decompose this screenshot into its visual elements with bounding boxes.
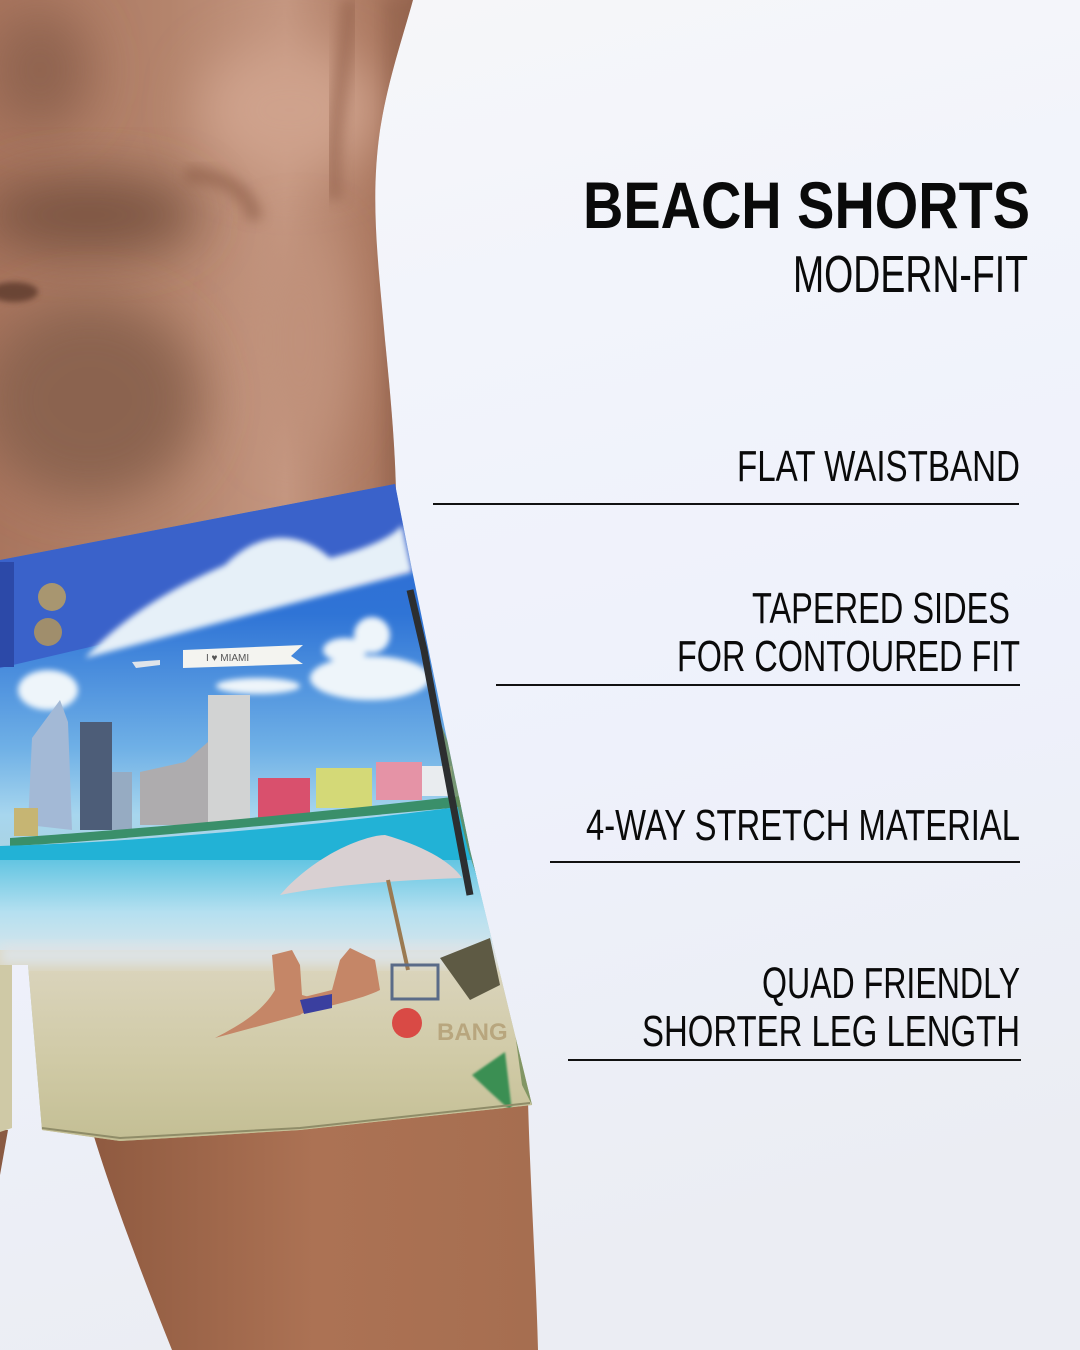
banner xyxy=(183,645,303,668)
feature: tapered sides xyxy=(496,584,1020,686)
photo: buttons xyxy=(34,583,66,646)
banner: I ♥ MIAMI xyxy=(206,653,249,664)
photo: far leg of shorts xyxy=(0,962,12,1132)
sea xyxy=(0,804,490,880)
beach table xyxy=(392,965,438,999)
feature: shorter leg xyxy=(568,959,1021,1061)
photo: hem xyxy=(42,1103,530,1138)
sand xyxy=(0,950,540,1150)
umbrella xyxy=(280,835,462,895)
photo: zipper xyxy=(410,590,470,895)
plane xyxy=(132,660,160,668)
swim trunks xyxy=(300,994,332,1014)
woman xyxy=(215,950,307,1038)
palm xyxy=(442,726,532,1105)
logo text on shorts: BANG xyxy=(437,1019,508,1046)
chair xyxy=(440,938,500,1000)
photo: model thigh xyxy=(92,1100,538,1350)
skyline xyxy=(28,700,72,830)
photo: printed beach shorts xyxy=(0,480,540,1150)
photo: waist placket xyxy=(0,562,14,667)
ball xyxy=(392,1008,422,1038)
man xyxy=(300,948,380,1014)
photo: model torso xyxy=(0,0,420,570)
photo: far leg xyxy=(0,1130,8,1175)
